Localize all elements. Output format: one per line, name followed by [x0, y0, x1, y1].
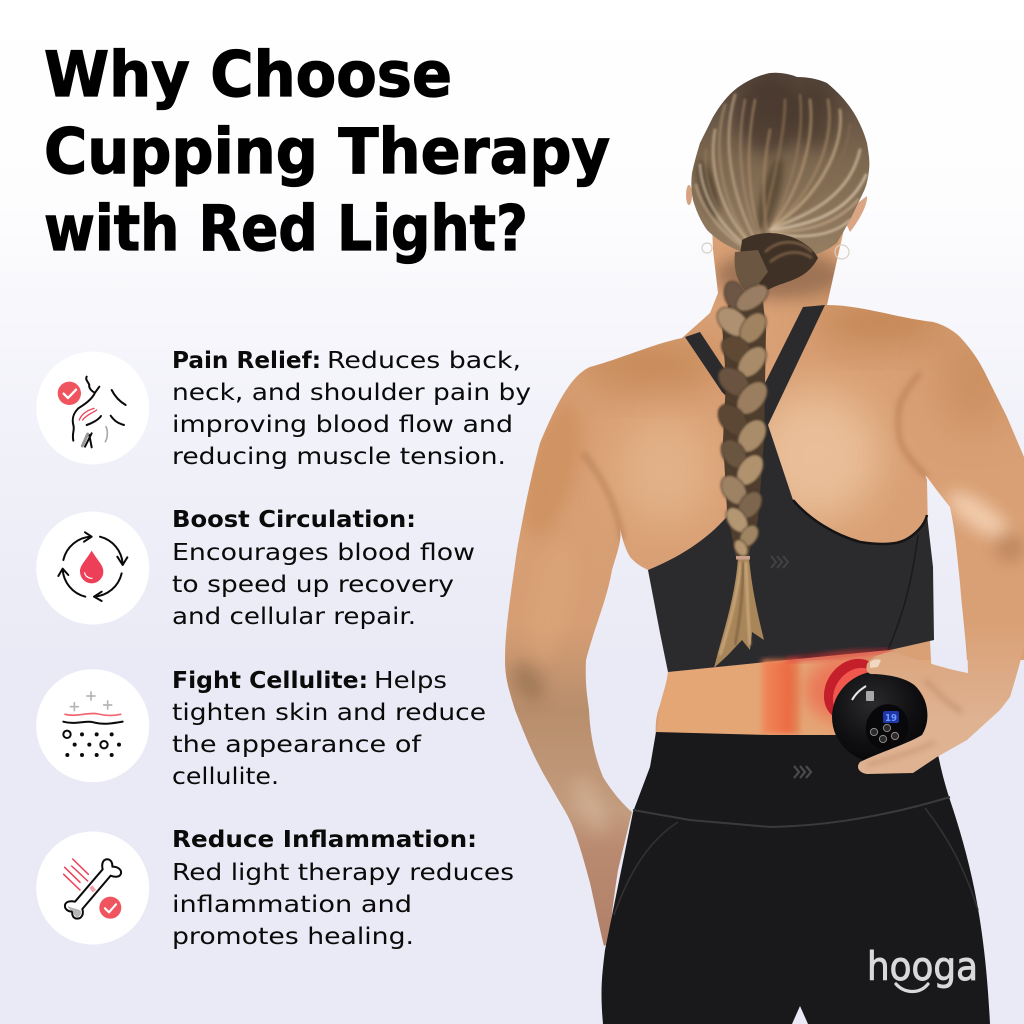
panel: pain relief — [36, 346, 531, 470]
text: fight cellulite — [172, 666, 486, 790]
text: fight cellulite: tighten skin and reduce — [172, 698, 486, 726]
text: pain relief: reducing muscle tension. — [172, 442, 506, 470]
text: fight cellulite: Helps — [374, 666, 447, 694]
title: with Red Light? — [44, 192, 528, 265]
earrings — [702, 243, 712, 253]
red light glow on lower back — [762, 651, 895, 734]
text: pain relief: neck, and shoulder pain by — [172, 378, 531, 406]
icon: blood drop with circulation arrows — [36, 512, 149, 624]
cupping device with red light — [812, 647, 928, 763]
photo: woman from behind — [505, 73, 1024, 1024]
title: Why Choose — [44, 38, 452, 111]
panel: boost circulation — [36, 505, 475, 630]
panel: fight cellulite — [36, 666, 486, 790]
title — [44, 38, 610, 265]
braid — [711, 233, 818, 668]
text: boost circulation: Boost Circulation: — [172, 505, 416, 533]
text: reduce inflammation: Red light therapy reduces — [172, 858, 514, 886]
logo: hooga: hooga — [867, 945, 978, 990]
text: fight cellulite: cellulite. — [172, 762, 279, 790]
panel: reduce inflammation — [36, 825, 514, 950]
text: pain relief: improving blood flow and — [172, 410, 513, 438]
text: reduce inflammation — [172, 825, 514, 950]
text: boost circulation: to speed up recovery — [172, 570, 454, 598]
text: pain relief: Reduces back, — [327, 346, 521, 374]
text: boost circulation — [172, 505, 475, 630]
text: boost circulation: Encourages blood flow — [172, 538, 475, 566]
text: boost circulation: and cellular repair. — [172, 602, 416, 630]
text: fight cellulite: the appearance of — [172, 730, 422, 758]
control panel: 19 — [885, 713, 897, 724]
chevrons on waistband — [794, 766, 811, 778]
text: reduce inflammation: promotes healing. — [172, 922, 414, 950]
text: pain relief: Pain Relief: — [172, 346, 321, 374]
hair tie and tail — [714, 558, 764, 668]
hand holding device — [858, 620, 1024, 774]
title: Cupping Therapy — [44, 115, 610, 188]
leggings — [602, 732, 990, 1024]
text: reduce inflammation: Reduce Inflammation: — [172, 825, 477, 853]
bra — [648, 305, 934, 672]
hair — [686, 73, 869, 259]
text: reduce inflammation: inflammation and — [172, 890, 412, 918]
skin: arms and torso — [505, 225, 1024, 946]
text: pain relief — [172, 346, 531, 470]
chevrons on bra — [771, 556, 788, 568]
icon: skin layers and cellulite — [36, 669, 149, 782]
icon: shoulder pain — [36, 352, 149, 464]
text: fight cellulite: Fight Cellulite: — [172, 666, 368, 694]
icon: bone with red light — [36, 832, 149, 944]
